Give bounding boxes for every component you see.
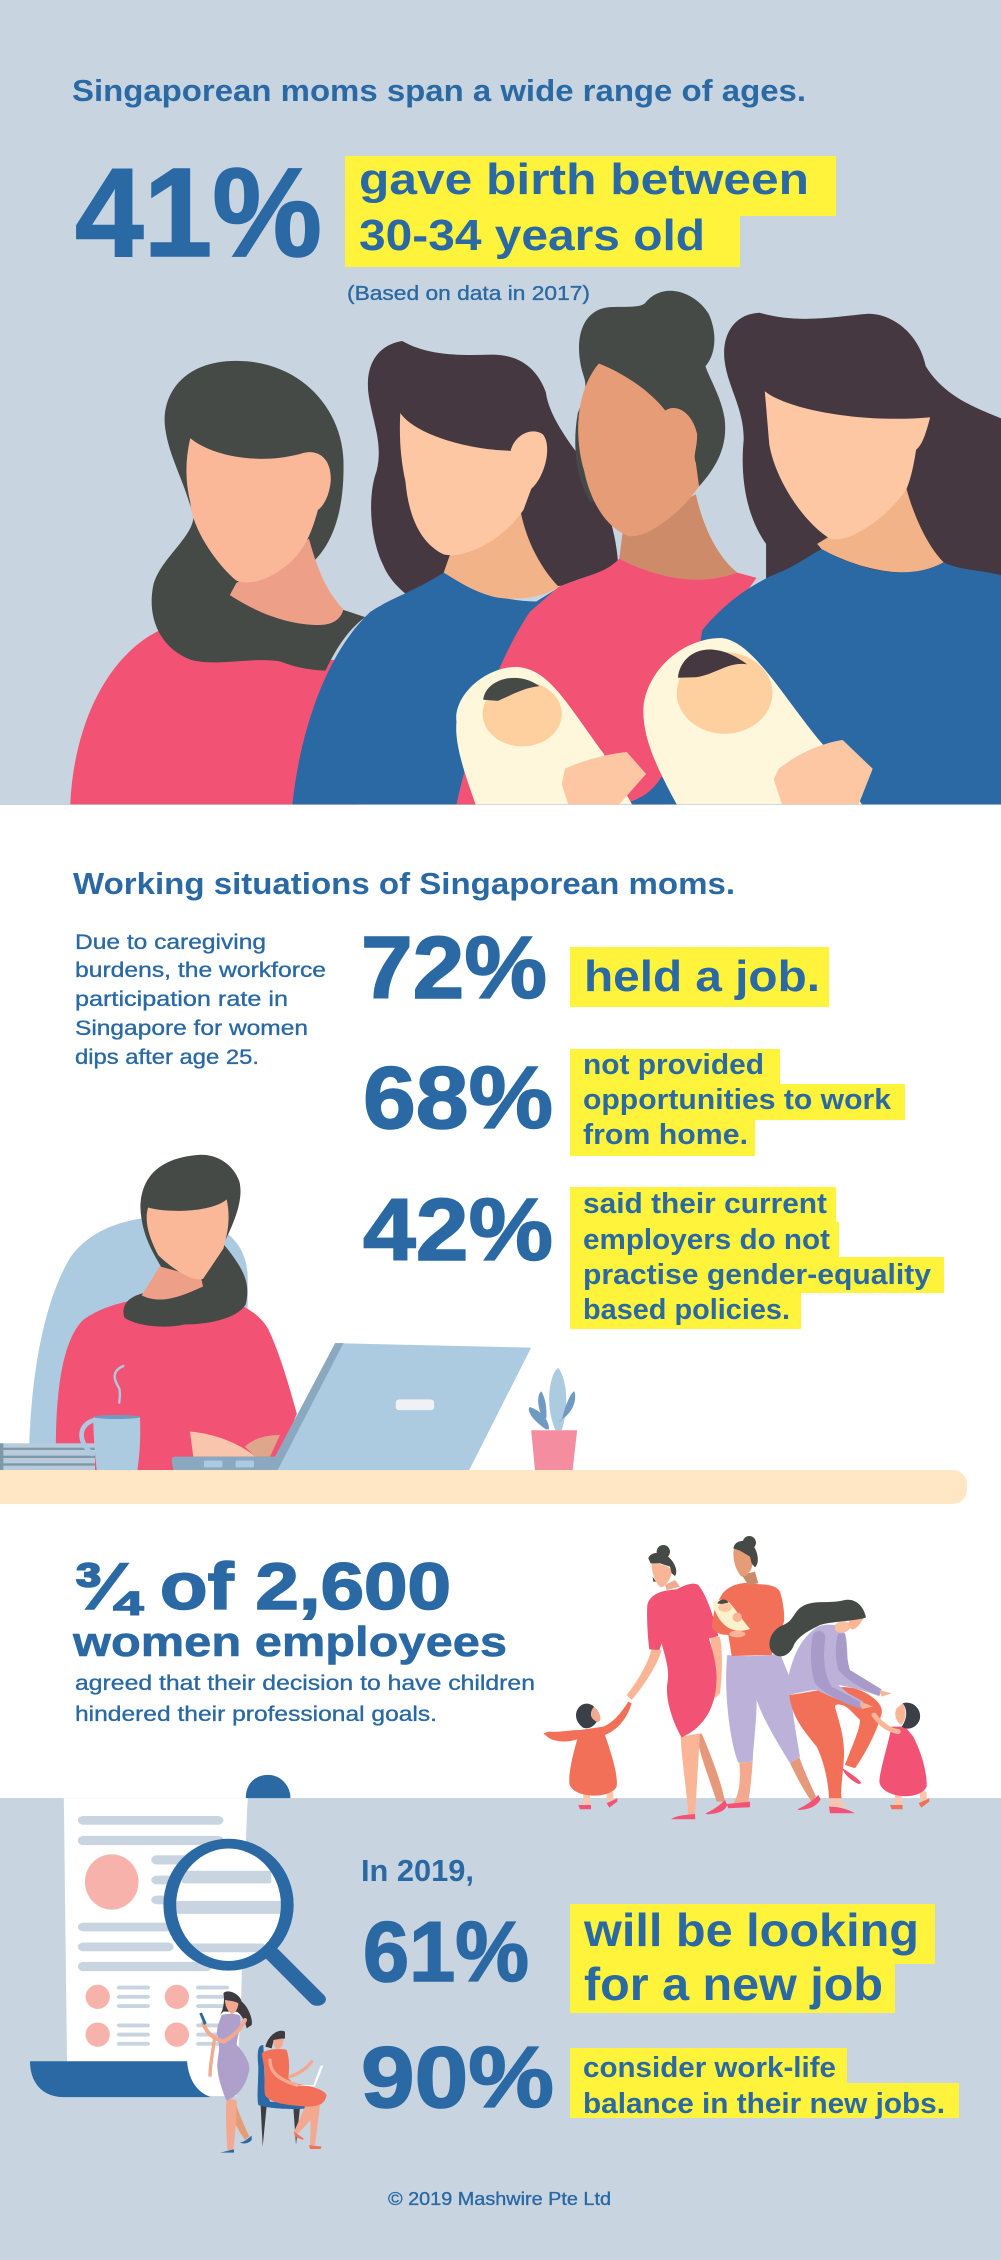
- illustration: family group: [543, 1536, 929, 1819]
- stat: 90%: 90%: [361, 2030, 554, 2126]
- chair: [29, 1217, 248, 1472]
- heading: working situations: Working situations of Singaporean moms.: [73, 866, 735, 901]
- callout: work-life balance: balance in their new jobs.: [583, 2088, 945, 2120]
- illustration: desk items: [0, 1366, 280, 1470]
- stat: 41%: 41%: [75, 142, 322, 283]
- magnifying glass: [170, 1844, 317, 1999]
- stat: 61%: 61%: [363, 1905, 529, 2000]
- callout: looking for a new job: for a new job: [584, 1958, 883, 2010]
- child in pink: [874, 1703, 929, 1809]
- callout: looking for a new job: [570, 1904, 935, 2013]
- callout: gave birth between 30-34: [345, 155, 836, 267]
- callout: not provided work from home: not provided: [583, 1049, 764, 1081]
- stat: 72%: 72%: [361, 918, 547, 1017]
- text block: hindered goals: agreed that their decision to have children: [75, 1672, 535, 1695]
- heading: moms span ages: Singaporean moms span a wide range of ages.: [72, 73, 806, 108]
- illustration: resume with magnifier: [30, 1775, 317, 2097]
- text block: workforce participation: Singapore for women: [75, 1017, 308, 1040]
- woman 4 hair: [724, 313, 1001, 581]
- books: [0, 1443, 95, 1470]
- resume paper: [30, 1775, 290, 2097]
- text: in 2019: In 2019,: [361, 1853, 474, 1888]
- panel: three-quarters of employees: [72, 1549, 535, 1726]
- desk: [0, 1470, 967, 1504]
- callout: looking for a new job: will be looking: [583, 1904, 919, 1956]
- illustration: two small women: [199, 1991, 327, 2153]
- mother bending to child: [769, 1600, 892, 1813]
- callout: gender-equality policies: said their current: [583, 1188, 827, 1220]
- illustration: woman at laptop: [29, 1155, 577, 1472]
- callout: gave birth between 30-34: 30-34 years old: [359, 211, 705, 260]
- callout: not provided work from home: from home.: [583, 1119, 748, 1151]
- baby 1: [456, 667, 646, 804]
- woman 2: [292, 341, 618, 804]
- mother in pink dress: [627, 1545, 727, 1819]
- callout: gender-equality policies: practise gender-equality: [583, 1259, 931, 1291]
- subheading: women employees: women employees: [72, 1618, 507, 1665]
- laptop screen: [268, 1343, 531, 1470]
- hands on keyboard: [190, 1432, 280, 1457]
- stat: 42%: 42%: [363, 1180, 553, 1279]
- sitting woman with laptop: [258, 2031, 327, 2149]
- callout: work-life balance: consider work-life: [583, 2052, 836, 2084]
- woman 3: [456, 291, 757, 804]
- woman 1: [70, 361, 365, 804]
- note: based on data in 2017: (Based on data in 2017): [347, 283, 590, 305]
- callout: not provided work from home: opportunities to work: [583, 1084, 892, 1116]
- baby 2: [643, 638, 873, 804]
- stat: 3/4 of 2,600: ¾ of 2,600: [73, 1549, 451, 1623]
- text block: hindered goals: hindered their professional goals.: [75, 1703, 437, 1726]
- callout: gender-equality policies: employers do not: [583, 1224, 830, 1256]
- text block: workforce participation: Due to caregiving: [75, 931, 266, 954]
- callout: held a job: held a job.: [584, 952, 820, 1001]
- cup: [82, 1366, 140, 1470]
- copyright: © 2019 Mashwire Pte Ltd: [388, 2189, 611, 2209]
- standing woman with phone: [199, 1991, 252, 2153]
- panel: working situations: [0, 866, 967, 1504]
- callout: gave birth between 30-34: gave birth between: [359, 155, 809, 204]
- laptop base: [172, 1457, 277, 1470]
- text block: workforce participation: dips after age 25.: [75, 1046, 259, 1069]
- woman 4: [622, 391, 1001, 804]
- panel: job search: [0, 1775, 1001, 2260]
- child in orange: [543, 1702, 632, 1809]
- callout: gender-equality policies: [570, 1187, 944, 1329]
- text block: workforce participation: participation rate in: [75, 988, 288, 1011]
- text block: workforce participation: [75, 931, 326, 1069]
- callout: work-life balance: [570, 2048, 959, 2120]
- callout: not provided work from home: [570, 1049, 905, 1156]
- panel: ages of moms: [0, 0, 1001, 805]
- stat: 68%: 68%: [363, 1048, 553, 1147]
- callout: gender-equality policies: based policies.: [583, 1294, 790, 1326]
- text block: hindered goals: [75, 1672, 535, 1726]
- woman: [56, 1155, 297, 1470]
- callout: held a job: [570, 947, 829, 1007]
- plant: [529, 1368, 577, 1470]
- mother holding baby: [712, 1536, 821, 1810]
- illustration: four mothers with babies: [70, 291, 1001, 804]
- text block: workforce participation: burdens, the workforce: [75, 959, 326, 982]
